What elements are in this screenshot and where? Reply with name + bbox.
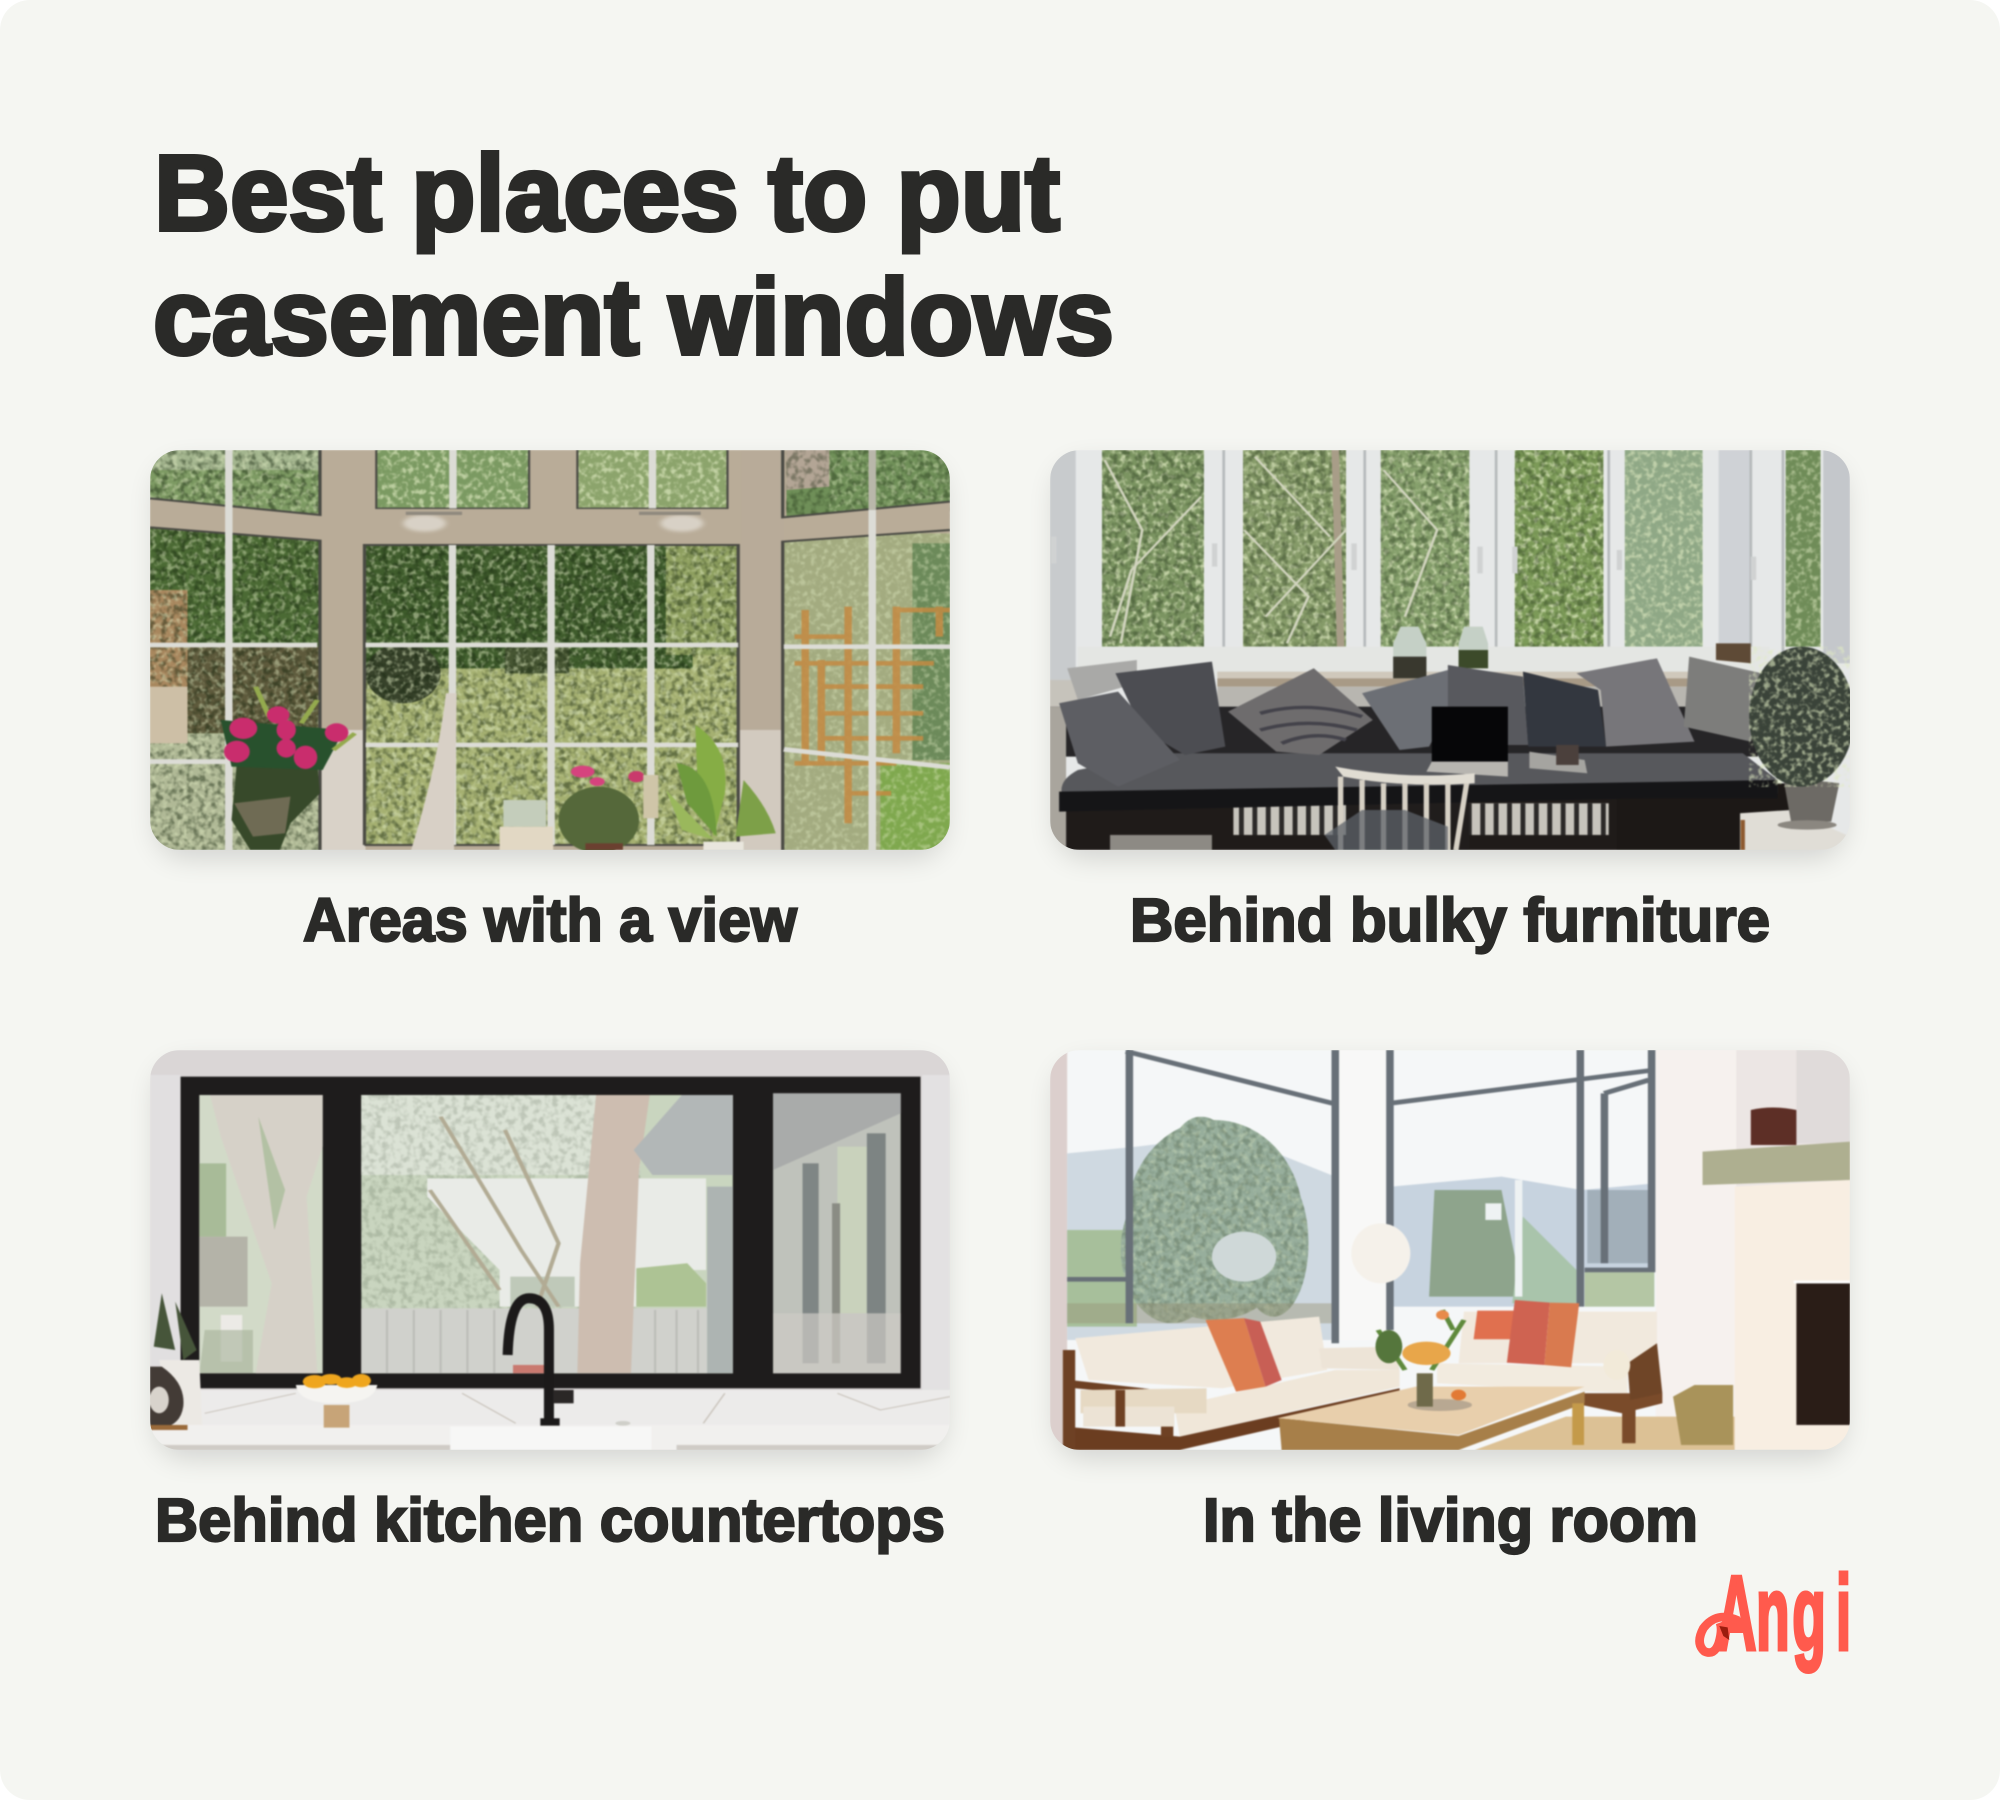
bench seat cushion bbox=[1061, 753, 1778, 793]
right sofa bbox=[1437, 1300, 1662, 1443]
photo: bright living room with corner windows bbox=[1050, 1050, 1850, 1450]
title: casement windows bbox=[153, 256, 1114, 377]
black window frame bbox=[181, 1077, 921, 1388]
dark window seals bbox=[150, 450, 950, 850]
garden seen through top panes bbox=[376, 450, 727, 508]
right wall bbox=[1656, 1050, 1850, 1450]
logo: Angi: Angi bbox=[1717, 1554, 1851, 1672]
label: behind bulky furniture: Behind bulky furniture bbox=[1130, 886, 1770, 954]
plant, white jug and dark vase bbox=[149, 1293, 202, 1430]
garden seen through centre window bbox=[366, 545, 738, 845]
hills and trees through the right window bbox=[1392, 1177, 1654, 1307]
black faucet bbox=[508, 1298, 574, 1426]
fruit bowl with lemons bbox=[296, 1374, 377, 1428]
left sofa bbox=[1063, 1317, 1400, 1450]
potted plant on side table bbox=[1716, 643, 1854, 850]
kitchen countertop bbox=[150, 1421, 950, 1450]
label: areas with a view: Areas with a view bbox=[303, 886, 798, 954]
right pane with reflection bbox=[773, 1093, 901, 1373]
fireplace mantel bbox=[1703, 1142, 1850, 1185]
window handles bbox=[403, 512, 703, 532]
coffee mug and tray bbox=[1529, 745, 1587, 773]
photo: window seat with grey cushions bbox=[1050, 450, 1854, 850]
tree foliage panes bbox=[1102, 450, 1821, 647]
card on the sill bbox=[500, 827, 553, 850]
white glazing bars bbox=[150, 450, 950, 850]
garden and orange trellis through right window bbox=[784, 533, 950, 850]
panel: behind kitchen countertops bbox=[149, 1050, 950, 1554]
white fireplace bbox=[1735, 1180, 1850, 1450]
kitchen backsplash bbox=[150, 1390, 950, 1427]
jar on the mantel bbox=[1751, 1107, 1796, 1145]
centre pane with tree, house and fence bbox=[361, 1095, 733, 1373]
grey pillows bbox=[1058, 656, 1761, 769]
white corner post bbox=[1338, 1050, 1389, 1340]
panel: areas with a view bbox=[150, 450, 950, 954]
photo: bay window overlooking a garden bbox=[150, 450, 950, 853]
label: in the living room: In the living room bbox=[1203, 1486, 1698, 1554]
white sash frame lines and handles bbox=[1212, 450, 1785, 652]
garden seen through left windows bbox=[150, 450, 320, 850]
white sculptural vase bbox=[411, 693, 457, 850]
left pane with trees bbox=[199, 1095, 323, 1373]
title: Best places to put bbox=[154, 132, 1060, 253]
terrarium jars bbox=[1393, 627, 1488, 678]
white chair bbox=[1325, 767, 1475, 850]
panel: behind bulky furniture bbox=[1050, 450, 1854, 954]
green leafy plant bbox=[666, 725, 776, 850]
dark window frames bbox=[1067, 1050, 1654, 1343]
window sill and ledge bbox=[1050, 647, 1770, 707]
floor bbox=[1475, 1417, 1735, 1450]
radiator and shadow below the bench bbox=[1066, 783, 1790, 850]
bench backing bbox=[1050, 707, 1758, 757]
hills and trees through the left window bbox=[1067, 1117, 1335, 1340]
title bbox=[153, 132, 1114, 377]
flower vase bbox=[1375, 1310, 1466, 1407]
photo: kitchen window with black frame bbox=[149, 1050, 950, 1450]
label: behind kitchen countertops: Behind kitchen countertops bbox=[155, 1486, 945, 1554]
laptop bbox=[1426, 707, 1508, 777]
wooden coffee table bbox=[1277, 1387, 1585, 1450]
woven basket bbox=[1673, 1385, 1733, 1445]
panel: in the living room bbox=[1050, 1050, 1850, 1554]
hanging paper lamp bbox=[1351, 1223, 1410, 1283]
window frame: beige posts and transoms bbox=[150, 450, 950, 850]
vase of pink roses bbox=[221, 687, 355, 850]
potted pink flowers bbox=[559, 766, 658, 853]
garden seen through top right pane bbox=[786, 450, 950, 518]
